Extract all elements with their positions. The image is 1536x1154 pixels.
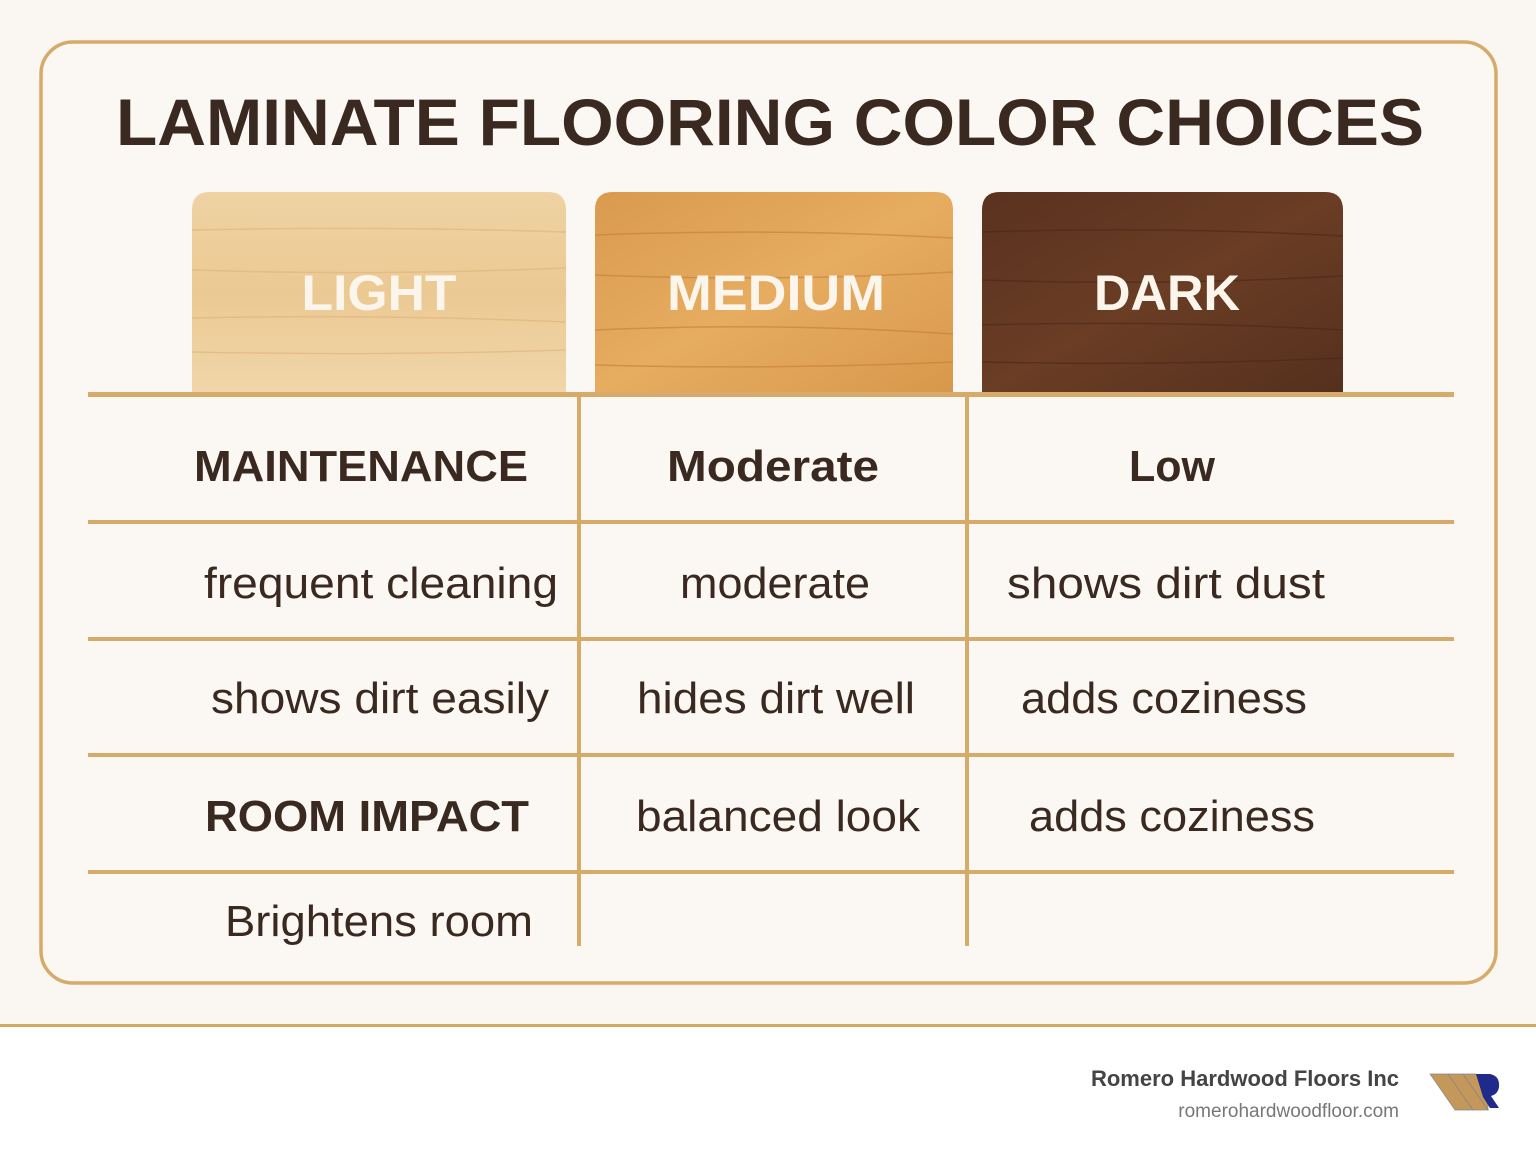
table text: balanced look xyxy=(636,792,921,841)
table text: moderate xyxy=(680,559,870,608)
title: LAMINATE FLOORING COLOR CHOICES xyxy=(116,85,1424,159)
table text: Brightens room xyxy=(225,897,533,946)
swatch: medium: MEDIUM xyxy=(667,265,885,321)
table text: shows dirt dust xyxy=(1007,559,1325,608)
footer brand text xyxy=(1091,1066,1399,1122)
swatch: light xyxy=(192,192,566,392)
table text: Moderate xyxy=(667,442,879,491)
footer brand text: Romero Hardwood Floors Inc xyxy=(1091,1066,1399,1091)
swatch: dark: DARK xyxy=(1094,265,1240,321)
table text: adds coziness xyxy=(1029,792,1315,841)
swatch: light: LIGHT xyxy=(302,265,456,321)
table text: Low xyxy=(1129,442,1216,491)
icon: logo xyxy=(1430,1074,1499,1110)
swatch: dark xyxy=(982,192,1343,392)
table text: adds coziness xyxy=(1021,674,1307,723)
footer brand text: romerohardwoodfloor.com xyxy=(1178,1101,1399,1122)
table text xyxy=(194,442,1325,946)
table text: hides dirt well xyxy=(637,674,915,723)
table text: MAINTENANCE xyxy=(194,442,528,491)
table text: shows dirt easily xyxy=(211,674,549,723)
swatch: medium xyxy=(595,192,953,392)
panel: card xyxy=(41,42,1496,983)
table text: frequent cleaning xyxy=(204,559,558,608)
table text: ROOM IMPACT xyxy=(205,792,529,841)
